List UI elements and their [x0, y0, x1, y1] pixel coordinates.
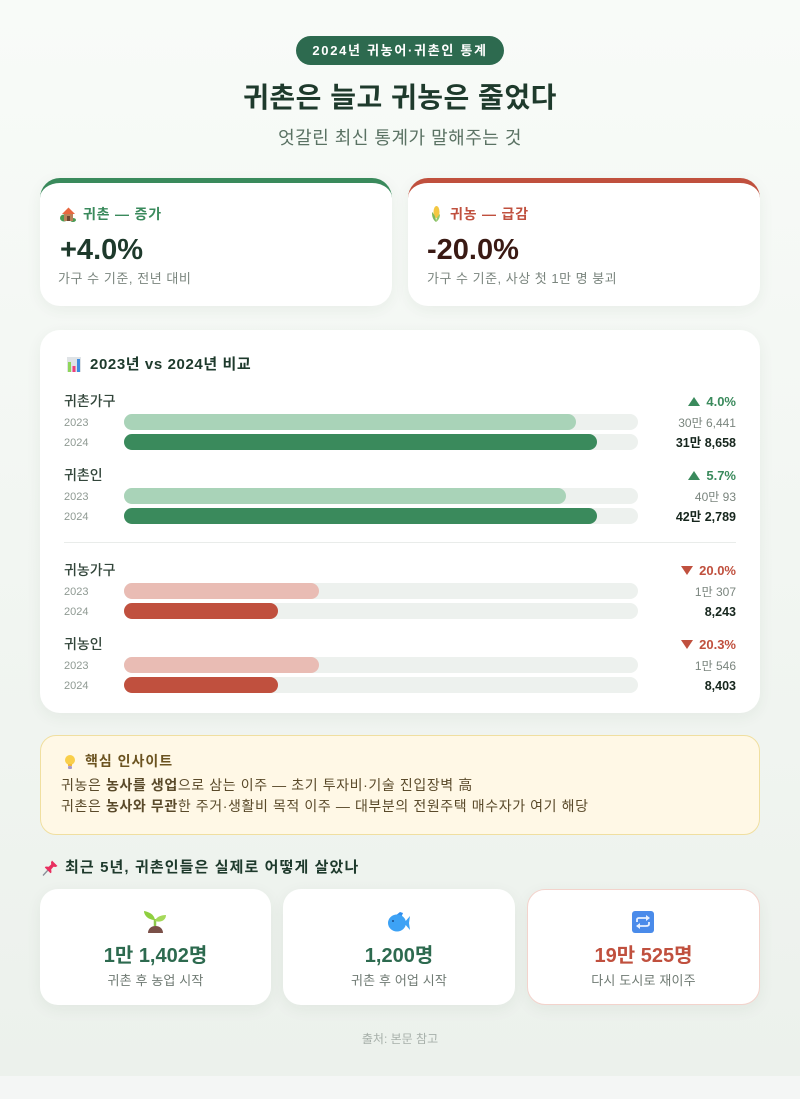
value: 1,200명	[365, 945, 433, 967]
chart group: 귀촌가구	[64, 393, 736, 450]
note: 가구 수 기준, 사상 첫 1만 명 붕괴	[427, 271, 617, 286]
change: 5.7%	[706, 468, 736, 483]
badge: 2024 statistics	[296, 36, 504, 65]
source note: 출처: 본문 참고	[362, 1032, 438, 1046]
icon: repeat	[632, 911, 654, 933]
label: 귀농가구	[64, 562, 116, 578]
change: 20.3%	[699, 637, 736, 652]
chart group: 귀농가구: 8,243	[705, 605, 736, 619]
chart group: 귀촌인: 40만 93	[695, 490, 736, 504]
bar 2023	[124, 414, 638, 430]
chart group: 귀촌가구: 31만 8,658	[676, 436, 736, 450]
bar 2024	[124, 677, 638, 693]
value: 19만 525명	[594, 945, 692, 967]
bar 2024	[124, 508, 638, 524]
chart group: 귀농가구: 2024	[64, 606, 88, 618]
label: 다시 도시로 재이주	[591, 973, 696, 988]
title: 귀촌은 늘고 귀농은 줄었다	[243, 82, 557, 113]
icon: pushpin	[42, 860, 58, 876]
chart group: 귀농가구: 1만 307	[695, 585, 736, 599]
change	[688, 468, 736, 483]
chart group: 귀농인: 1만 546	[695, 659, 736, 673]
icon: house	[60, 208, 76, 222]
value: 1만 1,402명	[104, 945, 207, 967]
stat card: fishing	[283, 889, 515, 1005]
chart group: 귀촌가구: 2024	[64, 437, 88, 449]
chart group: 귀촌인: 2023	[64, 491, 88, 503]
bar 2023	[124, 657, 638, 673]
bar 2023	[124, 583, 638, 599]
label: 귀촌 increase: 귀촌 — 증가	[83, 206, 162, 222]
label: 귀농인	[64, 636, 103, 652]
section heading: 최근 5년, 귀촌인들은 실제로 어떻게 살았나	[65, 859, 359, 876]
icon: bar chart	[67, 357, 81, 372]
icon: corn	[432, 206, 440, 222]
panel: 귀농 decrease	[408, 178, 760, 306]
chart group: 귀농인: 2023	[64, 660, 88, 672]
chart group: 귀촌인: 2024	[64, 511, 88, 523]
change	[688, 394, 736, 409]
subtitle: 엇갈린 최신 통계가 말해주는 것	[278, 128, 522, 148]
icon: seedling	[144, 911, 166, 933]
icon: light bulb	[65, 755, 75, 769]
chart group: 귀농가구: 2023	[64, 586, 88, 598]
icon: fish	[388, 912, 410, 932]
stat card: farming	[40, 889, 271, 1005]
chart group: 귀촌가구: 30만 6,441	[678, 416, 736, 430]
bar 2024	[124, 603, 638, 619]
insight lines	[61, 777, 589, 814]
chart group: 귀촌인	[64, 467, 736, 524]
insight lines: 귀농은 농사를 생업으로 삼는 이주 — 초기 투자비·기술 진입장벽 高	[61, 777, 473, 793]
change	[681, 563, 736, 578]
change: 4.0%	[706, 394, 736, 409]
bar 2024	[124, 434, 638, 450]
label: 귀농 decrease: 귀농 — 급감	[450, 206, 529, 222]
label: 귀촌 후 어업 시작	[351, 973, 447, 988]
chart group: 귀농인: 8,403	[705, 679, 736, 693]
chart group: 귀촌인: 42만 2,789	[676, 510, 736, 524]
label: 귀촌가구	[64, 393, 116, 409]
chart group: 귀농가구	[64, 562, 736, 619]
change: 20.0%	[699, 563, 736, 578]
change	[681, 637, 736, 652]
chart group: 귀농인	[64, 636, 736, 693]
panel: 2023 vs 2024 comparison	[40, 330, 760, 713]
label: 귀촌 후 농업 시작	[107, 973, 204, 988]
heading: 핵심 인사이트	[85, 753, 173, 769]
stat: -20.0%: -20.0%	[427, 234, 519, 266]
chart group: 귀촌가구: 2023	[64, 417, 88, 429]
label: 귀촌인	[64, 467, 103, 483]
bar 2023	[124, 488, 638, 504]
chart group: 귀농인: 2024	[64, 680, 88, 692]
stat card: return to city	[527, 889, 760, 1005]
stat: +4.0%: +4.0%	[60, 234, 143, 266]
badge: 2024 statistics: 2024년 귀농어·귀촌인 통계	[312, 43, 488, 58]
panel: 귀촌 increase	[40, 178, 392, 306]
note: 가구 수 기준, 전년 대비	[58, 271, 191, 286]
callout: key insight	[40, 735, 760, 835]
insight lines: 귀촌은 농사와 무관한 주거·생활비 목적 이주 — 대부분의 전원주택 매수자가 여기 해당	[61, 798, 589, 814]
heading: 2023년 vs 2024년 비교	[90, 356, 251, 373]
